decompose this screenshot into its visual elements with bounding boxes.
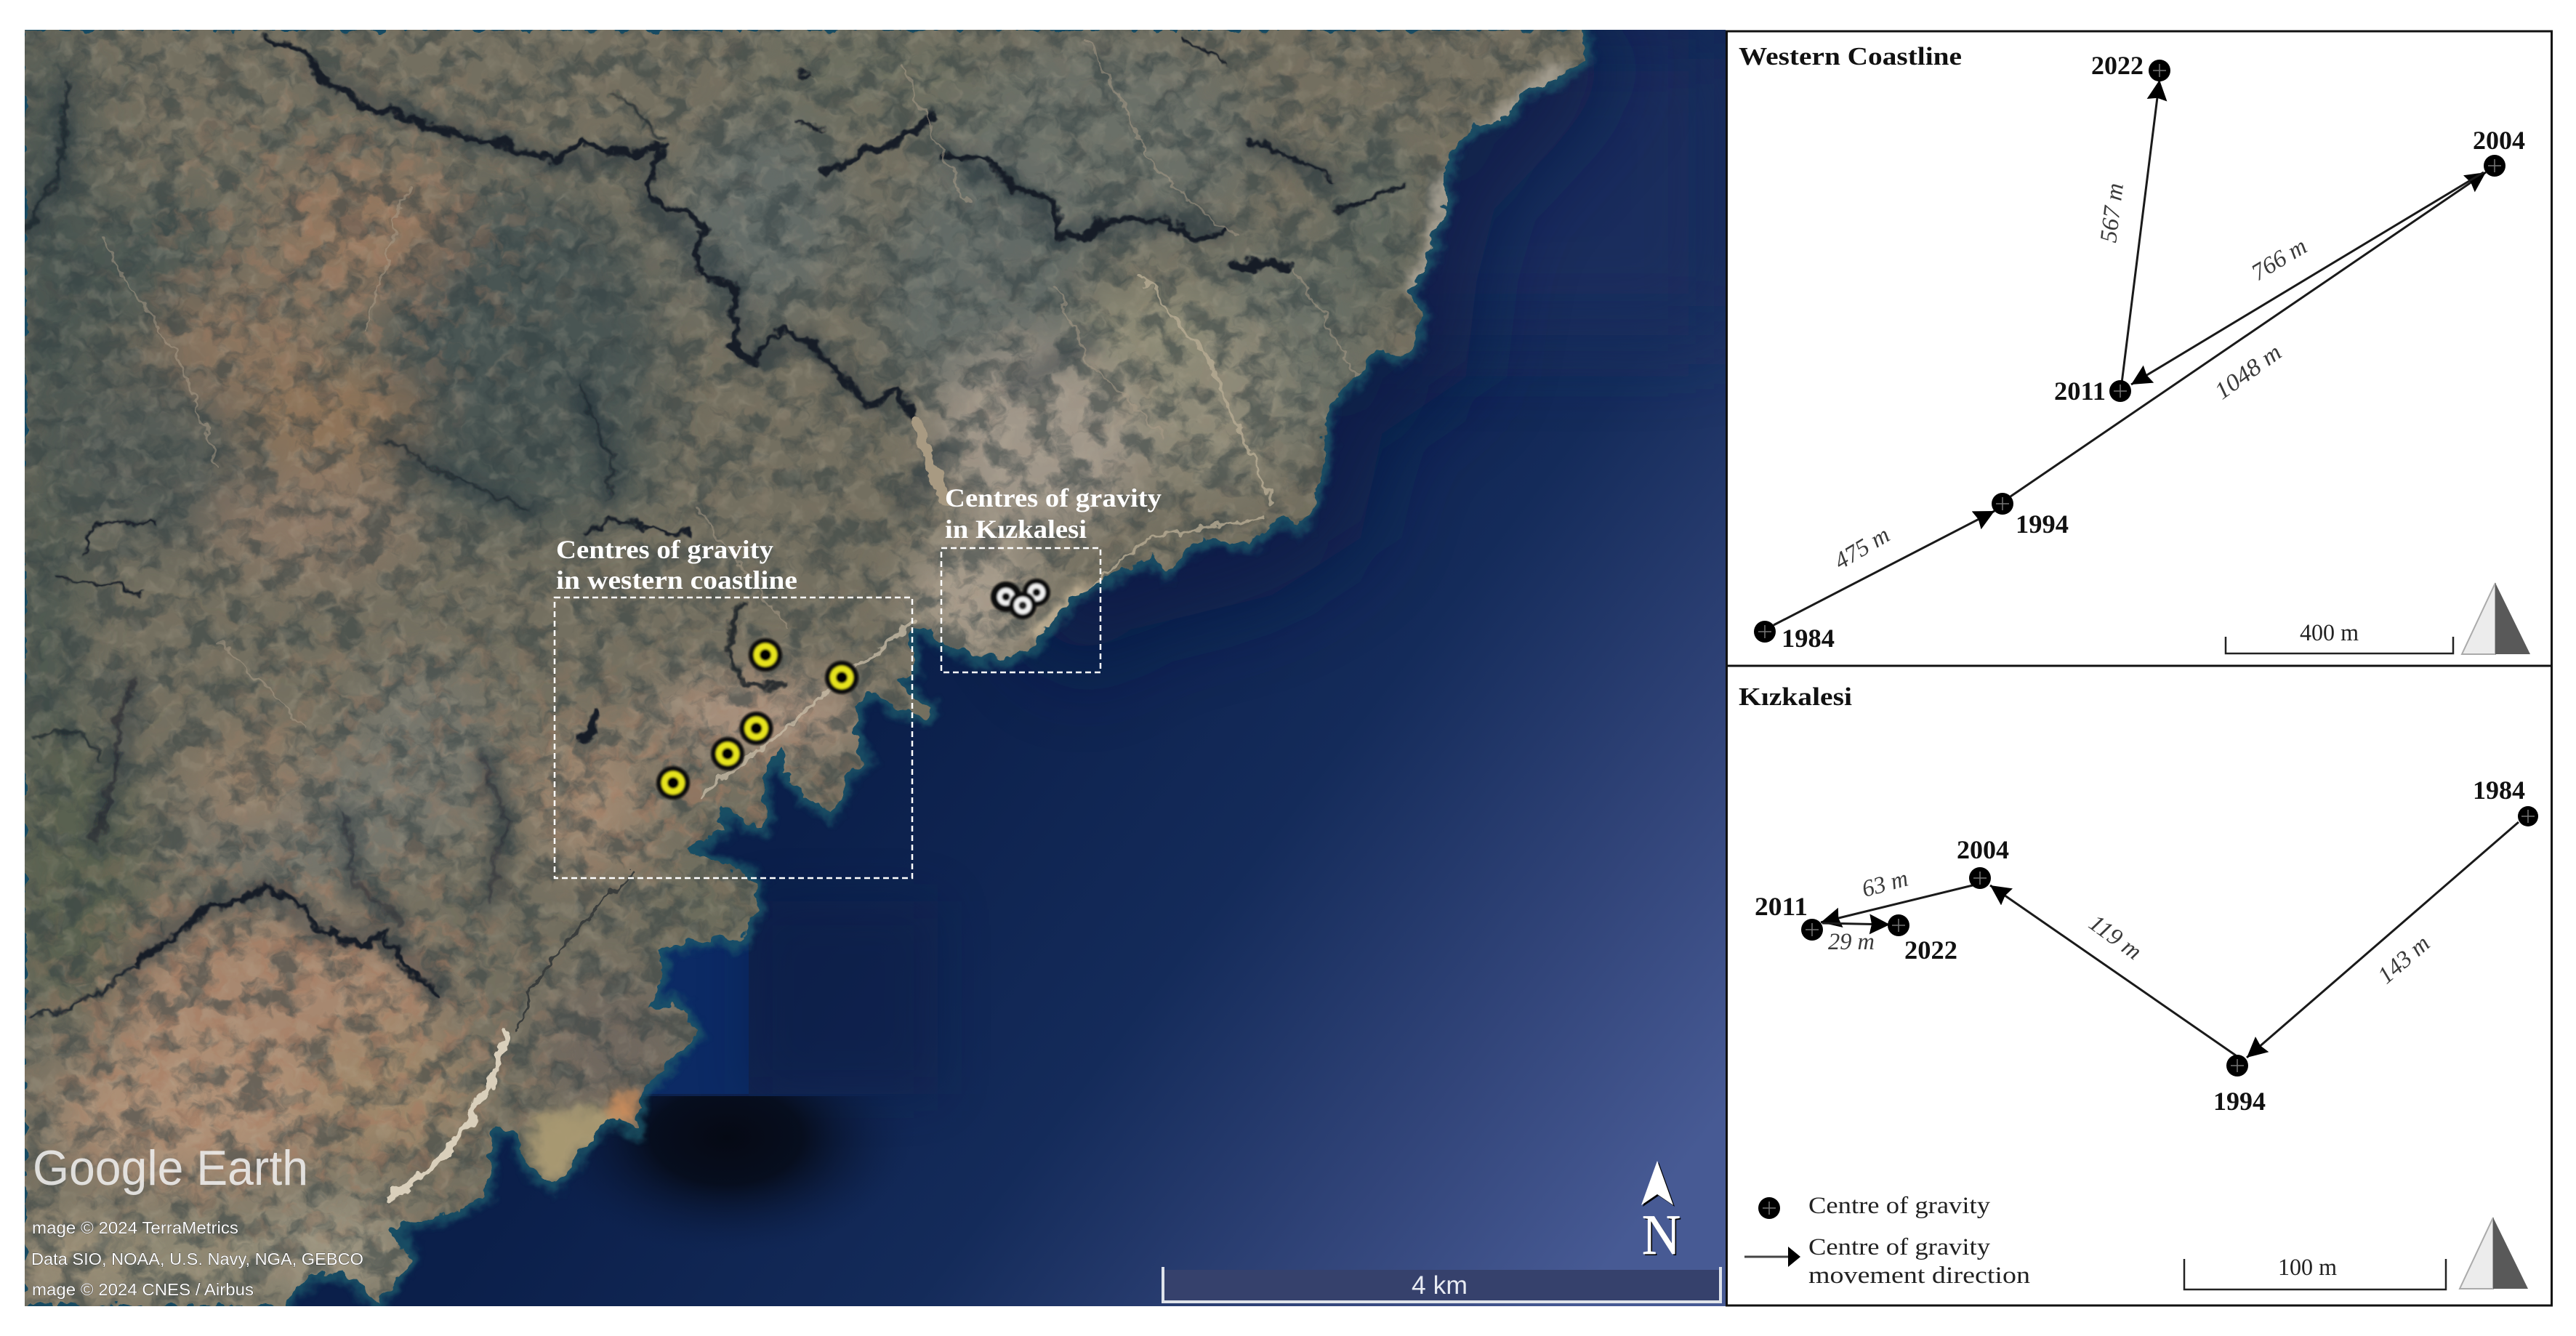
legend: movement direction label: movement direction [1808,1263,2030,1289]
label: centres of gravity in Kızkalesi: in Kızkalesi [945,515,1087,544]
map scale bar 4 km [1163,1267,1720,1302]
north pyramid icon [2462,583,2530,654]
point 1984: 1984 [1782,624,1835,653]
point 2004 [1957,835,2009,889]
coastline shallows [25,30,1585,1306]
dashed box: western coastline [555,597,912,878]
point 1994 [2213,1055,2266,1116]
point 2011: 2011 [2054,377,2106,406]
point 2004: 2004 [1957,835,2009,864]
ravines [28,38,1401,1017]
heading: Kızkalesi: Kızkalesi [1739,683,1852,711]
point 2004 [2473,126,2525,177]
north arrow [1641,1161,1682,1268]
distance 63 m: 63 m [1859,866,1911,903]
Google Earth wordmark: Google Earth [33,1140,308,1196]
point 1984 [1754,621,1835,653]
scale bar 100 m [2184,1255,2446,1289]
legend: centre of gravity label: Centre of gravity [1808,1193,1991,1219]
point 1994 [1992,493,2069,539]
point 2022: 2022 [2091,51,2144,80]
panel: Kızkalesi [1727,666,2551,1305]
map scale bar 4 km: 4 km [1412,1271,1468,1300]
scale bar 400 m: 400 m [2300,620,2359,646]
label: centres of gravity in western coastline: in western coastline [556,566,797,595]
label: centres of gravity in western coastline: Centres of gravity [556,535,773,564]
point 2022 [1888,914,1957,965]
north pyramid icon [2460,1218,2528,1289]
arrow 2004 to 2011 [1821,885,1973,922]
arrow 1984 to 1994 [1774,511,1995,625]
distance 567 m: 567 m [2096,182,2129,244]
arrow 1994 to 2004 [2011,172,2486,496]
dashed box: Kızkalesi [941,548,1100,672]
arrow 2004 to 2011 [2131,172,2484,385]
arrow 2011 to 2022 [2122,80,2160,383]
imagery attribution: mage © 2024 CNES / Airbus [32,1280,254,1299]
arrow 2011 to 2022 [1822,923,1890,925]
north arrow: N [1643,1204,1682,1268]
roads [102,44,1367,1201]
scale bar 100 m: 100 m [2278,1255,2337,1281]
white markers: Kızkalesi centres of gravity [991,579,1050,619]
sea [25,30,1730,1308]
peninsula tan [528,65,1563,1186]
arrow 1984 to 1994 [2247,822,2519,1058]
point 2011 [2054,377,2131,406]
legend: centre of gravity dot [1758,1197,1780,1219]
label: centres of gravity in Kızkalesi [945,483,1162,544]
heading: Western Coastline: Western Coastline [1739,42,1962,71]
point 2022: 2022 [1904,935,1957,965]
legend: movement direction label [1808,1234,2030,1289]
imagery attribution [31,1218,363,1299]
satellite map panel [7,22,1730,1310]
point 2011 [1755,892,1823,941]
legend [1744,1193,2030,1289]
distance 119 m: 119 m [2084,910,2146,965]
imagery attribution: mage © 2024 TerraMetrics [32,1218,238,1237]
land surface [7,22,1726,1310]
panel: Western Coastline [1727,31,2551,666]
distance 143 m: 143 m [2373,930,2435,989]
distance 29 m: 29 m [1828,929,1875,955]
scale bar 400 m [2226,620,2453,653]
legend: movement direction label: Centre of gravity [1808,1234,1991,1260]
label: centres of gravity in western coastline [556,535,797,595]
point 1984: 1984 [2473,776,2525,805]
point 2022 [2091,51,2170,81]
distance 475 m: 475 m [1830,522,1894,575]
imagery attribution: Data SIO, NOAA, U.S. Navy, NGA, GEBCO [31,1250,363,1268]
label: centres of gravity in Kızkalesi: Centres of gravity [945,483,1162,512]
point 1984 [2473,776,2538,826]
legend: movement direction arrow [1744,1247,1800,1267]
point 1994: 1994 [2016,510,2069,539]
yellow markers: western coastline centres of gravity [656,638,858,800]
point 2011: 2011 [1755,892,1808,921]
point 2004: 2004 [2473,126,2525,155]
north arrow: N [1642,1203,1681,1266]
distance 1048 m: 1048 m [2210,339,2287,405]
ravine shadows [28,79,1334,992]
arrow 1994 to 2004 [1990,885,2236,1055]
point 1994: 1994 [2213,1087,2266,1116]
distance 766 m: 766 m [2247,233,2311,286]
